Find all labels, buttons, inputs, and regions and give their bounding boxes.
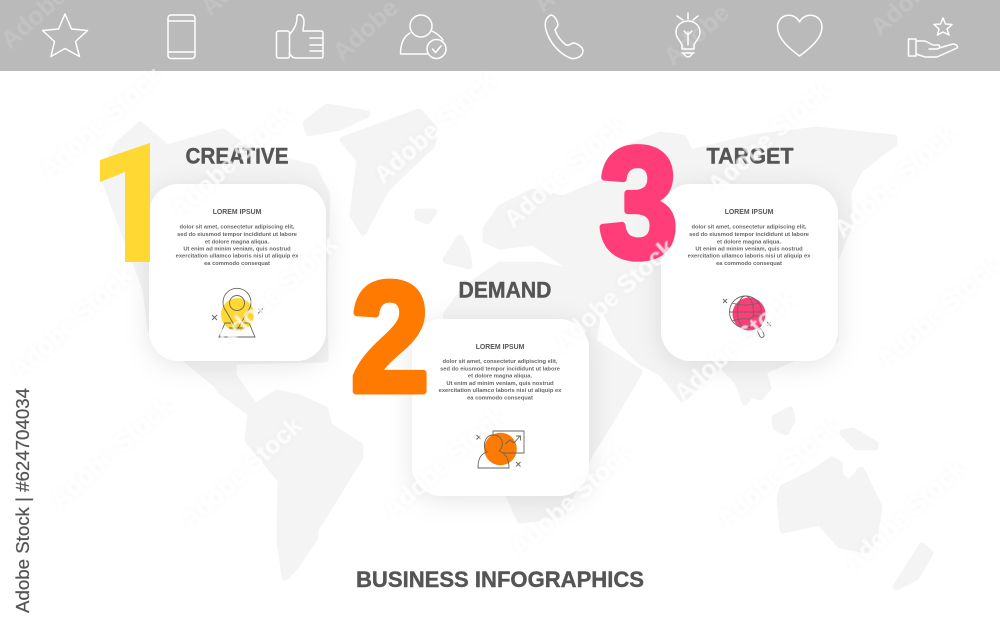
card text: creative: dolor sit amet, consectetur adipiscing elit, bbox=[179, 225, 295, 231]
icon: hand with star bbox=[908, 18, 958, 57]
number 3: 3 bbox=[599, 117, 678, 290]
panel heading: creative: CREATIVE bbox=[186, 144, 288, 168]
icon: people and chart bbox=[476, 431, 524, 468]
card text: target: dolor sit amet, consectetur adipiscing elit, bbox=[691, 225, 807, 231]
world map background bbox=[103, 107, 930, 587]
watermark pattern: Adobe Stock bbox=[505, 438, 638, 561]
watermark pattern: Adobe Stock bbox=[702, 76, 835, 199]
watermark pattern: Adobe Stock bbox=[712, 411, 845, 534]
card text: creative: sed do eiusmod tempor incididunt ut labore bbox=[177, 232, 297, 238]
card text: target bbox=[688, 209, 811, 267]
icon: map pin bbox=[212, 288, 263, 337]
card text: demand bbox=[439, 344, 562, 401]
card text: demand: sed do eiusmod tempor incididunt ut labore bbox=[440, 366, 560, 372]
watermark pattern: Adobe Stock bbox=[35, 61, 168, 184]
panel: target card bbox=[661, 144, 838, 361]
watermark pattern on icon bar bbox=[0, 0, 942, 71]
card text: demand: ea commodo consequat bbox=[467, 395, 533, 401]
card text: target: sed do eiusmod tempor incididunt ut labore bbox=[689, 232, 809, 238]
card text: demand: et dolore magna aliqua. bbox=[468, 374, 533, 380]
panel heading: demand: DEMAND bbox=[458, 278, 552, 302]
stock id side label: Adobe Stock | #624704034 bbox=[12, 388, 33, 613]
icon: telephone handset bbox=[545, 15, 583, 59]
watermark pattern: Adobe Stock bbox=[5, 261, 138, 384]
top icon bar bbox=[0, 0, 1000, 71]
watermark pattern: Adobe Stock bbox=[548, 233, 681, 356]
number 2: 2 bbox=[351, 251, 429, 425]
watermark pattern: Adobe Stock bbox=[210, 230, 343, 353]
watermark pattern: Adobe Stock bbox=[828, 120, 961, 243]
watermark pattern: Adobe Stock bbox=[368, 66, 501, 189]
icon: heart bbox=[778, 15, 822, 56]
watermark pattern on icon bar: Adobe bbox=[658, 0, 735, 71]
watermark pattern: Adobe Stock bbox=[838, 454, 971, 577]
watermark pattern: Adobe Stock bbox=[498, 110, 631, 233]
card text: target: ea commodo consequat bbox=[716, 261, 782, 267]
footer title: BUSINESS INFOGRAPHICS bbox=[356, 567, 644, 592]
panel: demand card bbox=[412, 278, 589, 496]
icon: user with check bbox=[400, 15, 446, 58]
watermark pattern: Adobe Stock bbox=[378, 401, 511, 524]
card text: creative: LOREM IPSUM bbox=[213, 209, 262, 216]
card text: creative: ea commodo consequat bbox=[204, 261, 270, 267]
card text: target: LOREM IPSUM bbox=[725, 209, 774, 216]
card text: target: et dolore magna aliqua. bbox=[717, 239, 782, 245]
card text: target: Ut enim ad minim veniam, quis nostrud bbox=[695, 246, 803, 252]
card text: creative: Ut enim ad minim veniam, quis nostrud bbox=[183, 246, 291, 252]
card text: creative: exercitation ullamco laboris nisi ut aliquip ex bbox=[176, 254, 299, 260]
card text: target: exercitation ullamco laboris nisi ut aliquip ex bbox=[688, 254, 811, 260]
icon: thumbs up bbox=[276, 15, 323, 58]
watermark pattern: Adobe Stock bbox=[165, 100, 298, 223]
icon: smartphone bbox=[168, 15, 195, 58]
card text: demand: Ut enim ad minim veniam, quis nostrud bbox=[446, 381, 554, 387]
watermark pattern: Adobe Stock bbox=[668, 284, 801, 407]
card text: demand: LOREM IPSUM bbox=[476, 344, 525, 351]
watermark pattern: Adobe Stock bbox=[175, 411, 308, 534]
icon: star bbox=[42, 14, 88, 56]
icon: globe and magnifier bbox=[723, 296, 771, 338]
watermark pattern: Adobe Stock bbox=[45, 391, 178, 514]
icon: light bulb bbox=[676, 13, 700, 57]
panel heading: target: TARGET bbox=[706, 144, 794, 168]
card text: demand: dolor sit amet, consectetur adipiscing elit, bbox=[442, 359, 558, 365]
card text: demand: exercitation ullamco laboris nisi ut aliquip ex bbox=[439, 388, 562, 394]
panel: creative card bbox=[149, 144, 326, 361]
card text: creative: et dolore magna aliqua. bbox=[205, 239, 270, 245]
card text: creative bbox=[176, 209, 299, 267]
number 1: 1 bbox=[90, 107, 186, 299]
